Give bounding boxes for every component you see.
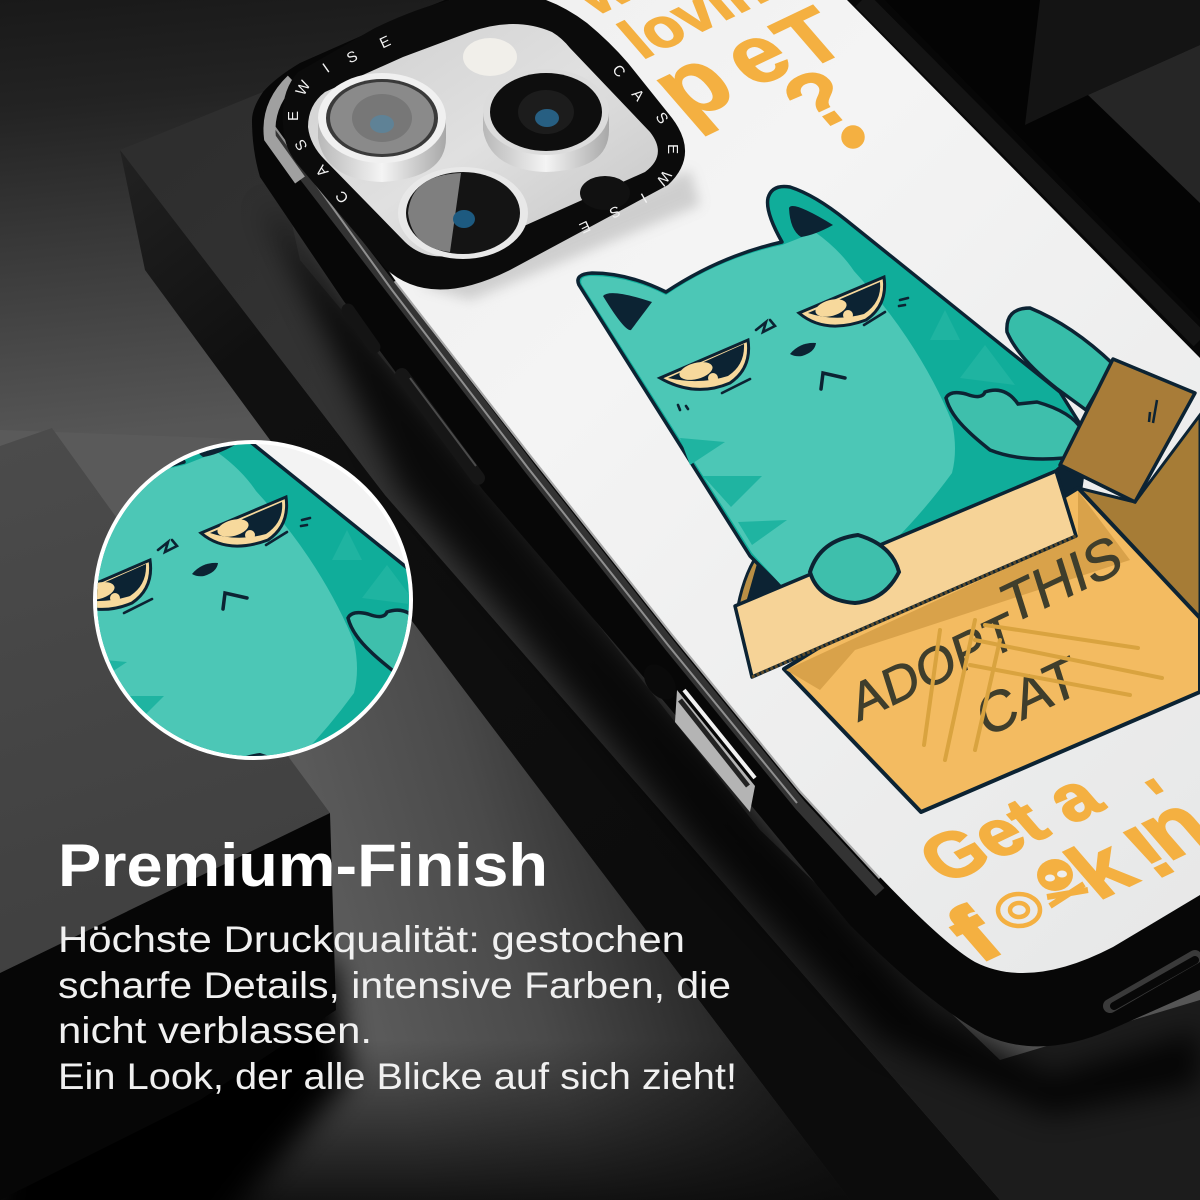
lower-left block (0, 428, 330, 973)
box back flap (1060, 359, 1195, 502)
box front (784, 488, 1200, 812)
bottom slogan: Get a (903, 759, 1119, 897)
brand text: CASEWISE ring (285, 33, 681, 236)
volume button (402, 375, 478, 478)
block shadow (0, 960, 350, 1200)
brand text: CASEWISE ring: E (577, 217, 593, 236)
box writing: THIS (995, 522, 1128, 636)
phone shadow (262, 200, 1200, 1115)
box writing: ADOPT (844, 600, 1023, 732)
middle finger paw (946, 390, 1082, 459)
illustration: cat in box (578, 186, 1200, 812)
phone case (252, 0, 1200, 1046)
right eye (799, 277, 885, 326)
brand text: CASEWISE ring: S (344, 48, 360, 67)
brand text: CASEWISE ring: S (292, 136, 311, 153)
brand text: CASEWISE ring: E (664, 144, 681, 154)
brand text: CASEWISE ring: E (285, 111, 302, 121)
lens 1 (318, 73, 446, 182)
ears inner (603, 293, 652, 330)
bottom slogan: k (1048, 822, 1153, 915)
bottom slogan: ' (1135, 768, 1191, 825)
island glass (308, 24, 658, 256)
top slogan (562, 0, 874, 148)
brand text: CASEWISE ring: I (320, 60, 333, 77)
lens 3 (398, 167, 528, 259)
chrome edge lines (268, 80, 880, 892)
brand text: CASEWISE ring: C (332, 187, 352, 206)
side button silver (637, 658, 755, 812)
upper right dark blocks (840, 0, 1200, 420)
bottom slogan (924, 778, 1200, 962)
cat raised arm (1007, 308, 1113, 410)
flash (463, 38, 517, 76)
brand text: CASEWISE ring: S (607, 202, 623, 221)
magnified detail circle (93, 440, 413, 760)
body text: scharfe Details, intensive Farben, die (58, 965, 731, 1006)
heading: Premium-Finish (58, 832, 548, 899)
wrinkles and mouth (678, 298, 908, 410)
island shadow (420, 170, 700, 300)
brand text: CASEWISE ring: C (609, 62, 629, 81)
body text: nicht verblassen. (58, 1010, 372, 1051)
box front flap (735, 471, 1076, 677)
top slogan: p (628, 30, 755, 140)
brand text: CASEWISE ring: A (313, 162, 332, 180)
box inner and side wall (738, 415, 1200, 640)
body text: Höchste Druckqualität: gestochen (58, 919, 685, 960)
camera island (283, 0, 685, 290)
left eye (660, 340, 749, 389)
phone screen with artwork (388, 0, 1200, 973)
cat light fur (581, 232, 955, 586)
box writing (858, 538, 1120, 732)
brand text: CASEWISE ring: W (293, 77, 315, 99)
floor (0, 430, 850, 1200)
brand text: CASEWISE ring: S (652, 109, 671, 127)
right bezel (862, 0, 1200, 340)
front paw (810, 535, 899, 603)
bottom slogan: ! (1105, 810, 1192, 894)
platform side (120, 150, 1000, 1200)
bottom slogan: f (930, 893, 1017, 976)
box shade (786, 491, 1130, 690)
top slogan: ? (764, 53, 874, 147)
cat stripes (680, 310, 1015, 545)
brand text: CASEWISE ring: W (652, 167, 675, 189)
brand text: CASEWISE ring: E (377, 33, 393, 52)
mute switch (348, 310, 374, 347)
charging port (1110, 957, 1195, 1006)
cat body (578, 186, 1090, 590)
icon: skull and crossbones (1037, 859, 1088, 906)
brand text: CASEWISE ring: A (628, 86, 647, 105)
nose (790, 343, 816, 356)
lidar sensor (580, 176, 630, 210)
body text (58, 919, 737, 1097)
brand text: CASEWISE ring: I (638, 189, 650, 206)
lens 2 (483, 69, 609, 172)
scratches (924, 620, 1162, 760)
box writing: CAT (970, 643, 1086, 749)
top slogan: e (700, 6, 810, 103)
body text: Ein Look, der alle Blicke auf sich zieht! (58, 1056, 737, 1097)
icon: spiral (998, 894, 1040, 926)
